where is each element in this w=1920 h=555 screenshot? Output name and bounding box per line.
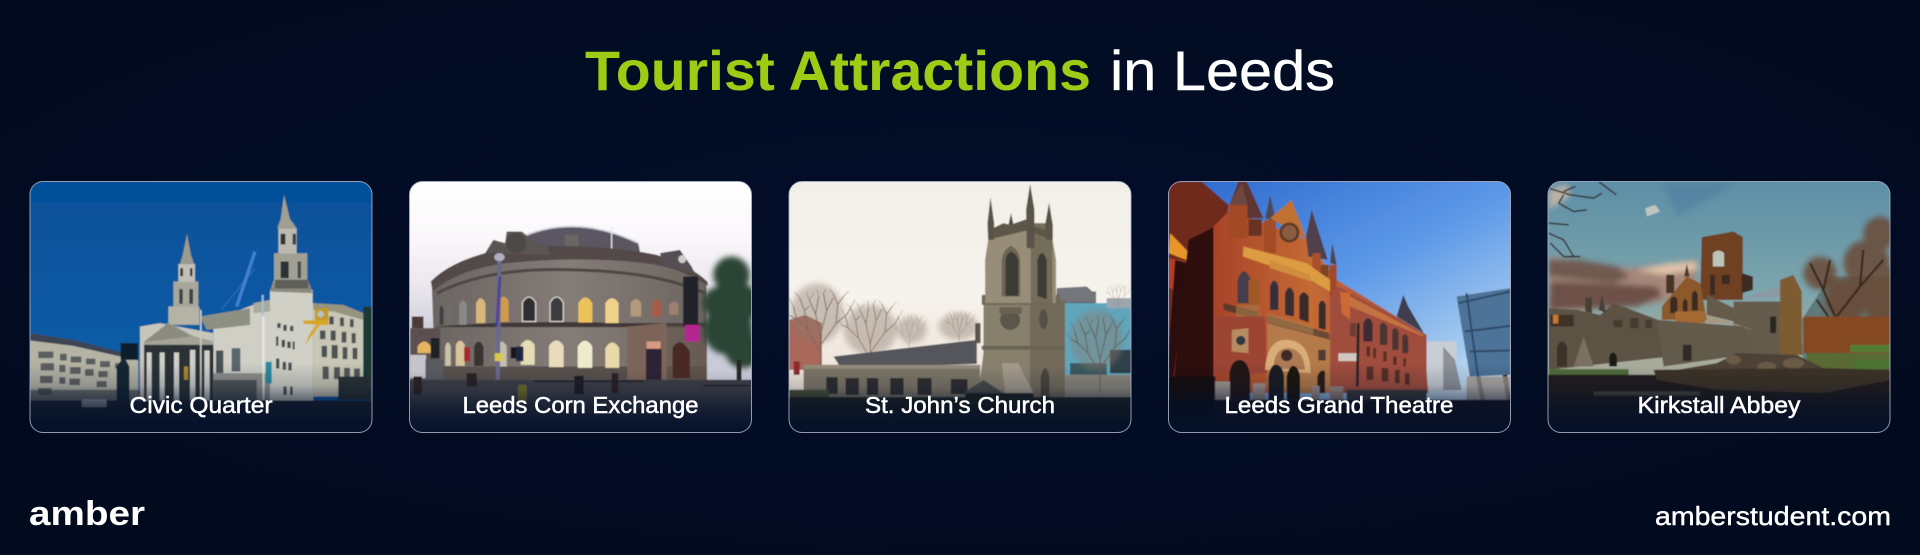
panel: St. John's Church <box>786 178 1135 438</box>
card border <box>789 182 1131 432</box>
photo: church tower <box>789 182 1131 418</box>
card border <box>1548 182 1890 432</box>
title: Tourist Attractions <box>585 39 1091 102</box>
label: Kirkstall Abbey <box>1638 392 1801 418</box>
panel: Leeds Corn Exchange <box>407 178 761 438</box>
title <box>585 39 1335 102</box>
upper windows <box>439 296 679 325</box>
label: Civic Quarter <box>130 392 273 418</box>
photo: Civic Quarter hall <box>27 178 377 438</box>
abbey <box>1744 287 1780 299</box>
panel: Civic Quarter <box>27 178 377 438</box>
lower windows <box>417 340 619 368</box>
label: Leeds Corn Exchange <box>462 392 698 418</box>
title: in Leeds <box>1110 39 1335 102</box>
card border <box>30 182 372 432</box>
photo: Grand Theatre facade <box>1168 182 1510 409</box>
logo: amber: amber <box>29 495 145 533</box>
label: St. John’s Church <box>865 392 1055 418</box>
photo: Corn Exchange rotunda <box>407 178 761 438</box>
panel: Kirkstall Abbey <box>1547 178 1900 438</box>
label: Leeds Grand Theatre <box>1224 392 1454 418</box>
card border <box>1168 182 1510 432</box>
card border <box>410 182 752 432</box>
panel: Leeds Grand Theatre <box>1167 178 1515 438</box>
website url: amberstudent.com <box>1655 501 1891 531</box>
photo: Kirkstall Abbey ruins <box>1547 178 1900 438</box>
